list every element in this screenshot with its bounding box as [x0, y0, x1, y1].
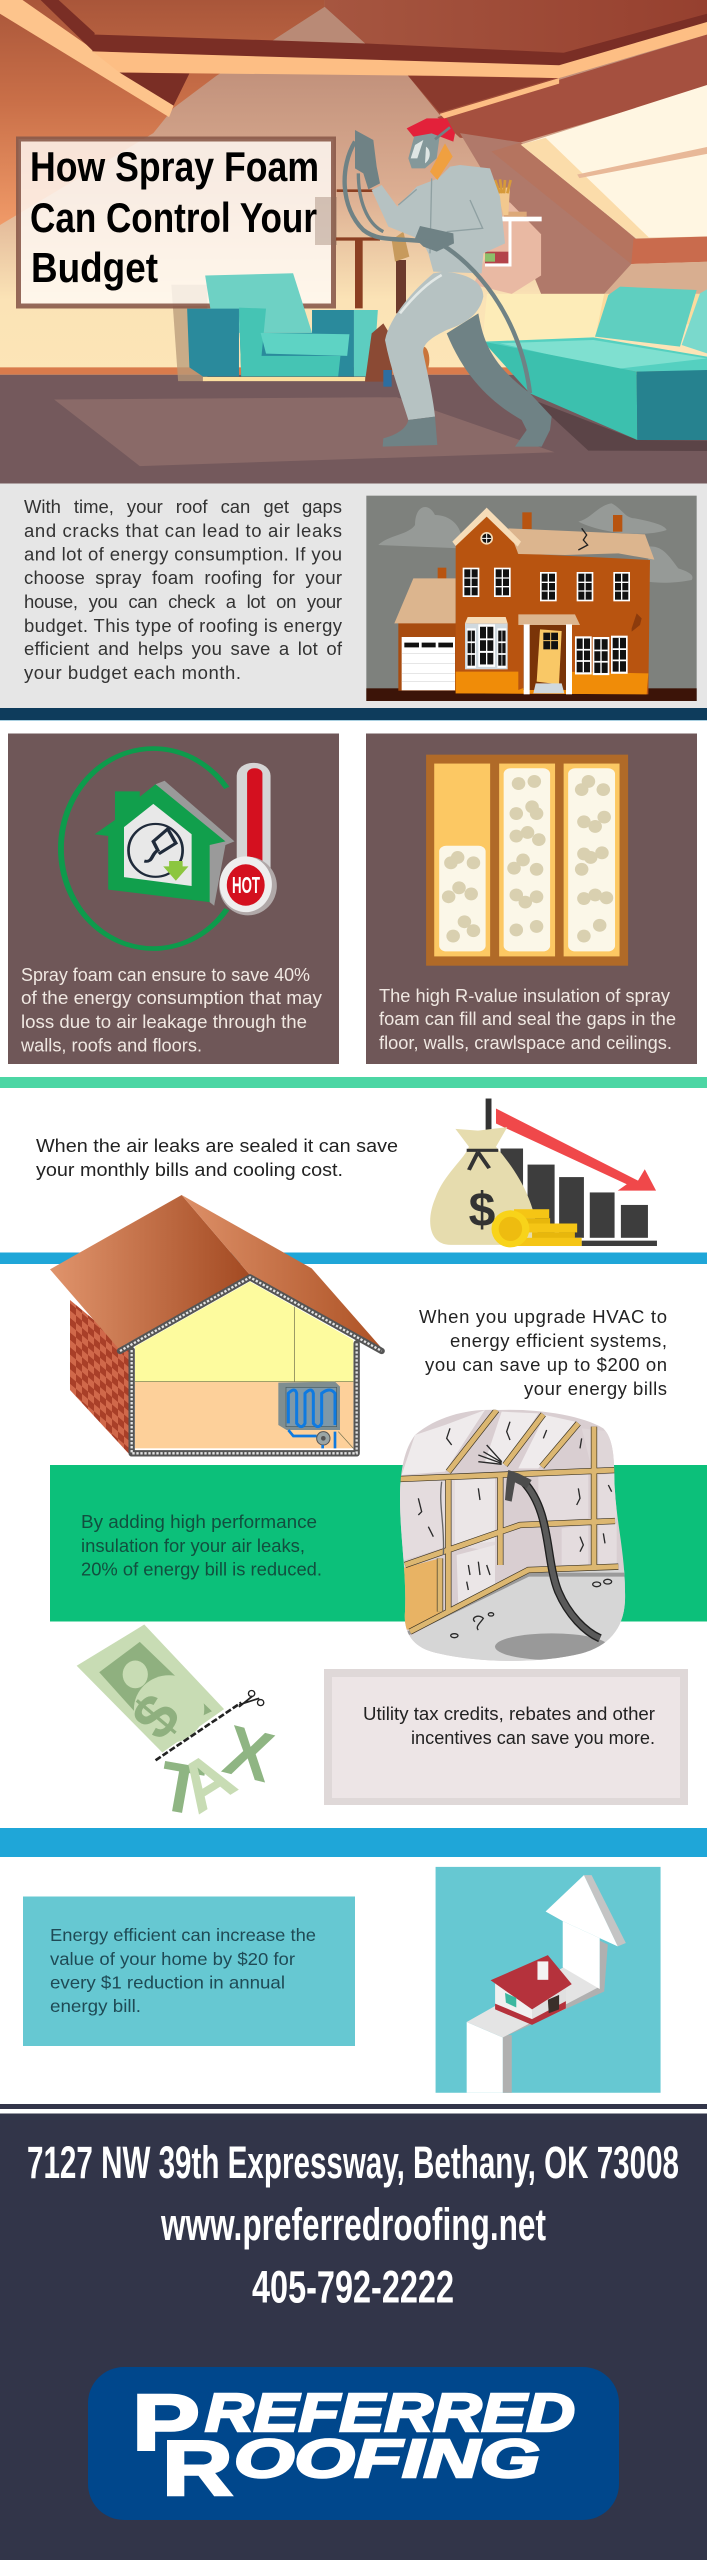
panel text: loss due to air leakage through the — [21, 1012, 307, 1032]
icon: money bag with falling bar chart — [430, 1099, 657, 1247]
intro paragraph: budget. This type of roofing is energy — [24, 615, 343, 636]
panel text — [20, 965, 322, 1056]
dark divider band — [0, 708, 707, 720]
footer contact text: 405-792-2222 — [252, 2262, 454, 2312]
intro paragraph: With time, your roof can get gaps — [24, 496, 342, 517]
text: high performance insulation — [81, 1512, 322, 1580]
intro paragraph: and cracks that can lead to air leaks — [24, 520, 342, 541]
text: HVAC upgrade: energy efficient systems, — [450, 1330, 667, 1351]
shelf with pencils — [485, 179, 542, 265]
green divider band — [0, 1077, 707, 1088]
text: high performance insulation: insulation for your air leaks, — [81, 1536, 305, 1556]
text: HVAC upgrade: When you upgrade HVAC to — [419, 1306, 667, 1327]
logo: Preferred Roofing — [88, 2367, 619, 2520]
text: high performance insulation: By adding high performance — [81, 1512, 317, 1532]
text: home value: value of your home by $20 for — [50, 1949, 295, 1969]
text: tax credits — [363, 1704, 655, 1748]
intro paragraph: your budget each month. — [24, 662, 241, 683]
blue divider band — [0, 1828, 707, 1857]
hero illustration: attic interior with spray foam worker — [0, 0, 707, 484]
ceiling beams — [0, 0, 707, 118]
text: tax credits: incentives can save you more. — [411, 1728, 655, 1748]
falling TAX letters: X — [217, 1710, 281, 1797]
dollar sign on bill: $ — [119, 1681, 194, 1752]
title text — [30, 143, 319, 291]
house cross-section with HVAC unit — [50, 1195, 383, 1455]
panel: R-value insulation — [366, 734, 697, 1064]
title text: Can Control Your — [30, 194, 317, 241]
panel text: floor, walls, crawlspace and ceilings. — [379, 1033, 672, 1053]
panel: home value — [23, 1896, 355, 2046]
icon: money bill cut from tax — [77, 1625, 281, 1830]
title box — [18, 139, 337, 306]
panel: utility tax credits — [324, 1669, 688, 1805]
text: air leaks sealed: your monthly bills and cooling cost. — [36, 1160, 343, 1180]
HVAC unit — [278, 1382, 340, 1448]
icon: insulated wall cavity — [426, 755, 628, 966]
panel text: The high R-value insulation of spray — [379, 986, 670, 1006]
armchair — [187, 273, 378, 381]
intro section background — [0, 484, 707, 708]
blue divider band — [0, 1252, 707, 1264]
text: home value — [50, 1925, 316, 2016]
text: home value: energy bill. — [50, 1996, 141, 2016]
text: high performance insulation: 20% of energy bill is reduced. — [81, 1560, 322, 1580]
floor lamp — [336, 189, 380, 308]
panel text — [379, 986, 676, 1053]
intro paragraph: choose spray foam roofing for your — [24, 567, 342, 588]
thin light divider — [0, 720, 707, 721]
small house — [491, 1955, 572, 2025]
text: tax credits: Utility tax credits, rebates and other — [363, 1704, 655, 1724]
title text: Budget — [31, 244, 158, 291]
panel text: of the energy consumption that may — [21, 988, 322, 1008]
falling TAX letters: T — [153, 1746, 209, 1830]
panel text: foam can fill and seal the gaps in the — [379, 1009, 676, 1029]
text: home value: Energy efficient can increase the — [50, 1925, 316, 1945]
illustration: home value rising arrow — [436, 1867, 661, 2093]
panel: energy savings — [8, 734, 339, 1064]
title text: How Spray Foam — [30, 143, 319, 190]
attic room — [0, 0, 707, 484]
panel text: walls, roofs and floors. — [20, 1036, 202, 1056]
footer contact text: www.preferredroofing.net — [160, 2199, 546, 2250]
text: HVAC upgrade — [419, 1306, 667, 1399]
dollar sign: $ — [469, 1184, 496, 1237]
intro paragraph: efficient and helps you save a lot of — [24, 638, 343, 659]
intro paragraph: house, you can check a lot on your — [24, 591, 342, 612]
text: HVAC upgrade: your energy bills — [524, 1378, 667, 1399]
sofa, furniture and worker — [336, 118, 707, 451]
icon: energy house and thermometer — [61, 749, 277, 949]
intro paragraph — [24, 496, 343, 683]
logo: Preferred Roofing: R — [162, 2424, 233, 2512]
text: air leaks sealed: When the air leaks are sealed it can save — [36, 1136, 398, 1156]
falling TAX letters: A — [164, 1735, 248, 1828]
panel text: Spray foam can ensure to save 40% — [21, 965, 310, 985]
guitar and bag — [365, 232, 429, 387]
logo: Preferred Roofing: REFERRED — [205, 2383, 575, 2443]
house with damaged roof illustration — [366, 496, 697, 701]
green panel — [50, 1465, 707, 1622]
text: home value: every $1 reduction in annual — [50, 1972, 285, 1992]
label: HOT: HOT — [232, 872, 260, 898]
footer background — [0, 2114, 707, 2560]
text: HVAC upgrade: you can save up to $200 on — [425, 1354, 667, 1375]
logo: Preferred Roofing: OOFING — [234, 2429, 540, 2489]
text: air leaks sealed — [36, 1136, 398, 1180]
worker — [345, 118, 552, 447]
intro paragraph: and lot of energy consumption. If you — [24, 544, 342, 564]
footer contact text — [27, 2137, 679, 2312]
illustration: spray insulation on wall framing — [400, 1410, 626, 1661]
double footer rule — [0, 2104, 707, 2109]
falling TAX letters — [153, 1710, 281, 1830]
logo: Preferred Roofing: P — [132, 2378, 200, 2467]
